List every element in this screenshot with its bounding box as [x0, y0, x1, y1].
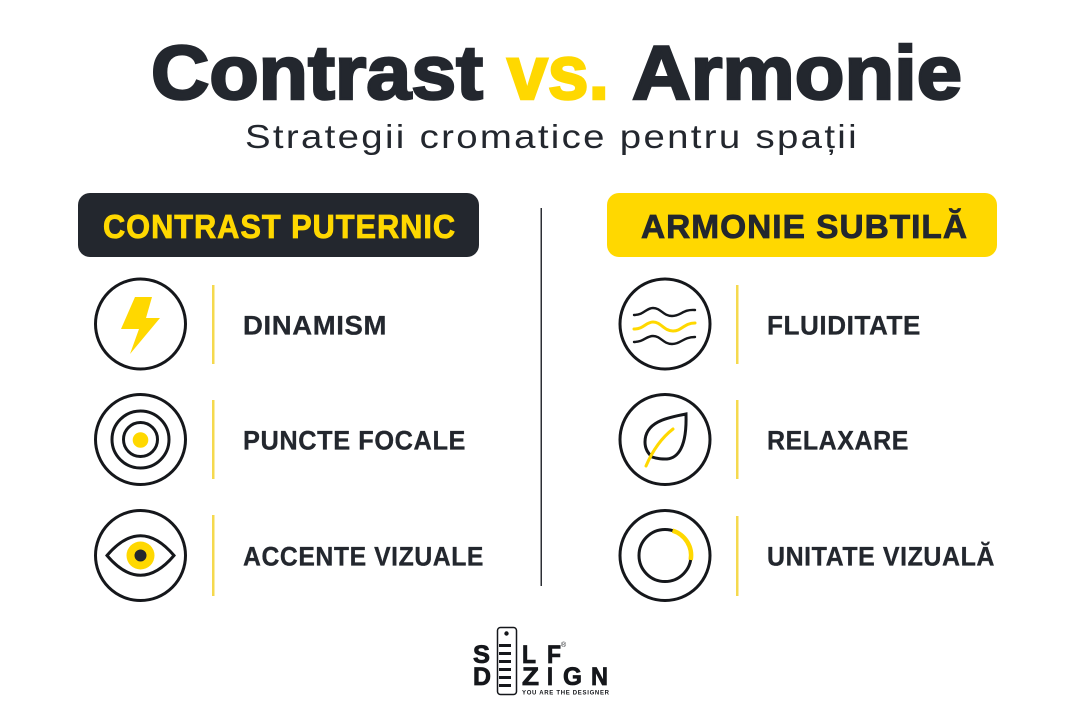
logo: self dezign: L — [522, 641, 536, 669]
panel: armonie subtila — [607, 193, 997, 600]
heading: armonie subtila: ARMONIE SUBTILĂ — [641, 208, 968, 246]
divider and label: unitate vizuala: UNITATE VIZUALĂ — [767, 540, 995, 572]
heading: contrast puternic: CONTRAST PUTERNIC — [103, 209, 456, 246]
center divider — [540, 208, 542, 586]
logo: self dezign: S — [473, 641, 490, 669]
logo: self dezign — [473, 628, 610, 696]
icon: ring — [620, 510, 710, 600]
logo: self dezign: ® — [561, 641, 567, 649]
logo: self dezign: G — [563, 663, 582, 691]
divider and label: accente vizuale: ACCENTE VIZUALE — [243, 542, 484, 572]
icon: lightning bolt — [96, 279, 186, 369]
divider and label: dinamism: DINAMISM — [243, 310, 387, 340]
icon: waves — [620, 279, 710, 369]
icon: leaf — [620, 394, 710, 484]
heading: contrast puternic — [78, 193, 479, 257]
heading: armonie subtila — [607, 193, 997, 257]
divider and label: fluiditate: FLUIDITATE — [767, 310, 921, 340]
title: vs. — [507, 31, 609, 116]
title: Armonie — [632, 31, 962, 116]
divider and label: puncte focale: PUNCTE FOCALE — [243, 426, 466, 456]
logo: self dezign: N — [591, 663, 608, 691]
logo: self dezign: Z — [522, 663, 539, 691]
panel: contrast puternic — [78, 193, 484, 600]
logo: self dezign: D — [473, 663, 491, 691]
divider and label: relaxare: RELAXARE — [767, 426, 909, 456]
logo: self dezign: I — [547, 663, 553, 691]
title: Contrast — [151, 31, 483, 116]
subtitle: Strategii cromatice pentru spații — [245, 118, 859, 155]
logo: self dezign: YOU ARE THE DESIGNER — [522, 690, 610, 696]
icon: eye — [96, 510, 186, 600]
icon: target — [96, 394, 186, 484]
title — [151, 31, 962, 116]
logo: self dezign: F — [547, 641, 561, 669]
